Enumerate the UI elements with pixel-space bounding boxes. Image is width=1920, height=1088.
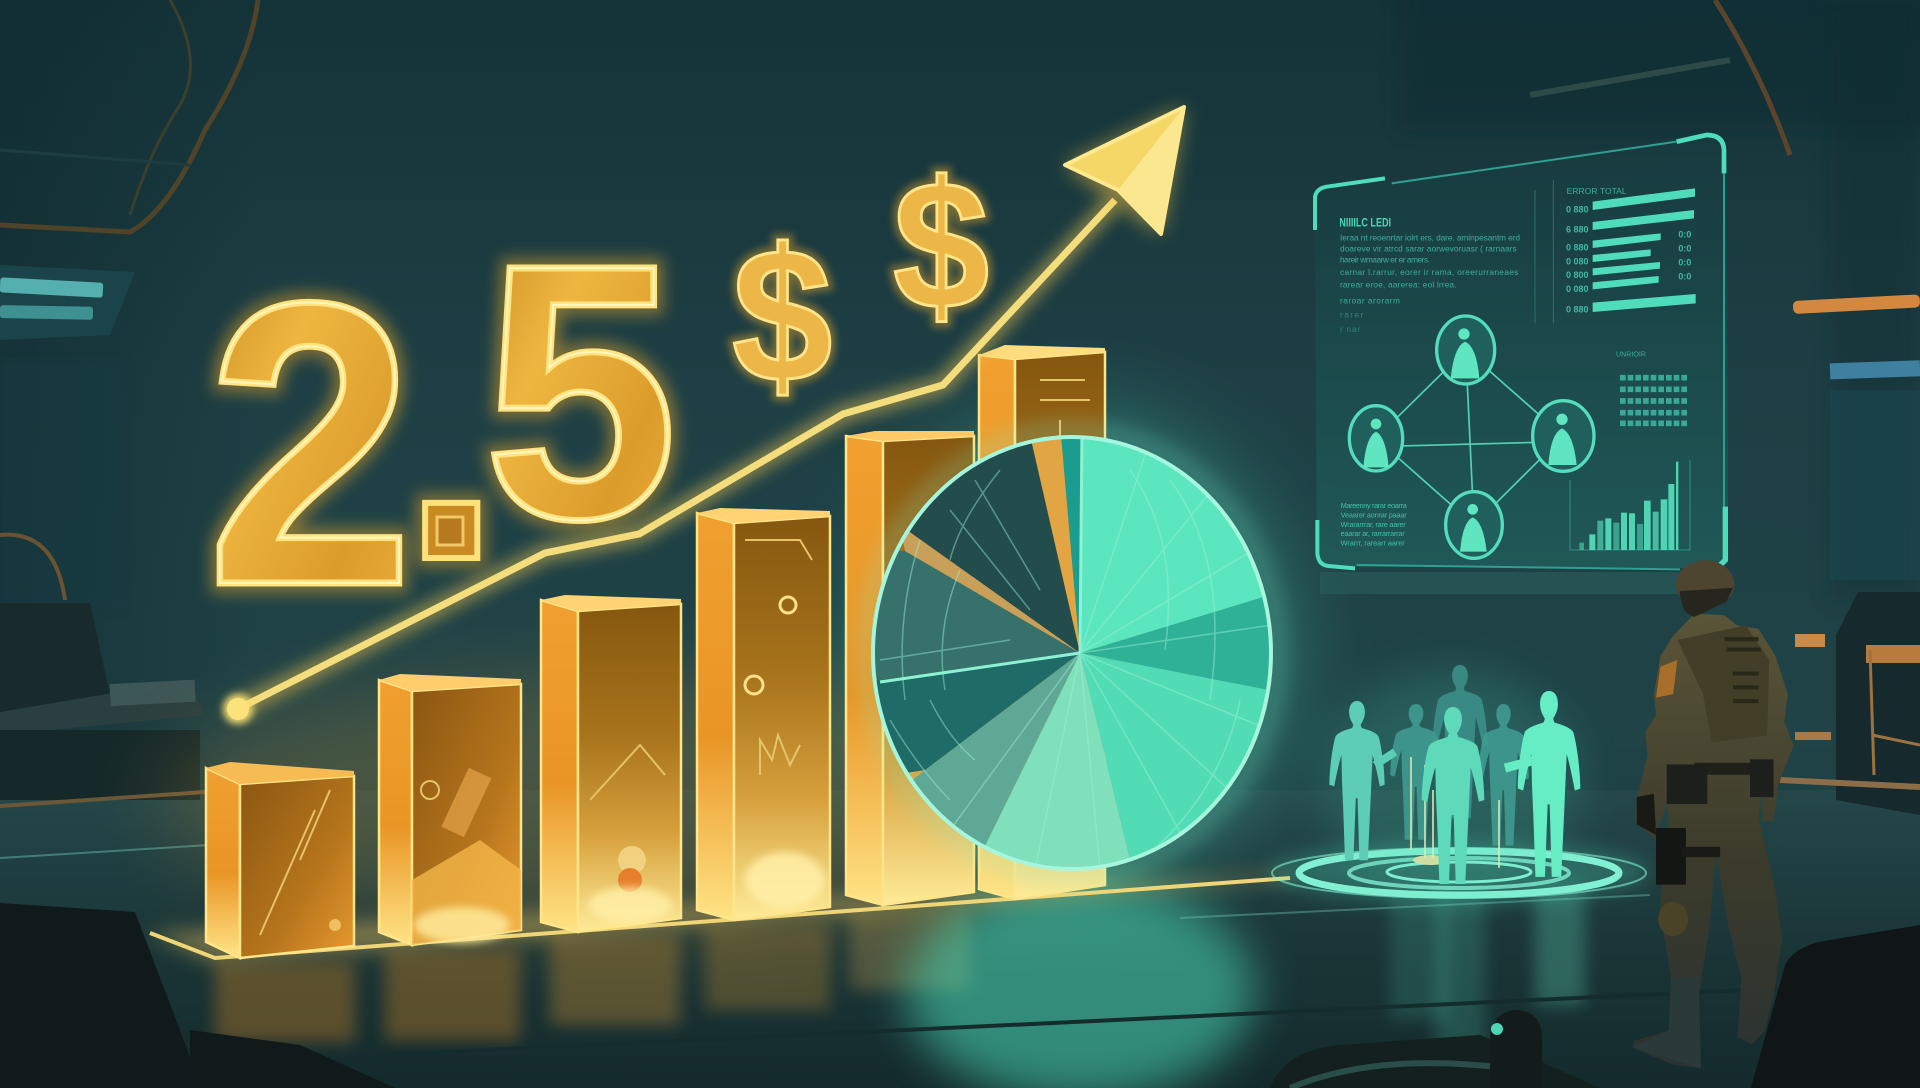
- screen footnote text: eaarar ar, rarrarrarrar: [1341, 529, 1405, 538]
- slice: tan wedge: [900, 525, 1080, 653]
- light pylons: [1411, 757, 1499, 868]
- person back right: [1478, 704, 1529, 846]
- chart glow: [160, 405, 1300, 930]
- screen body text: rarer: [1340, 309, 1364, 319]
- screen bottom reflection strip: [1320, 572, 1730, 594]
- slice: dark teal: [876, 654, 1078, 772]
- soldier figure: [1633, 560, 1794, 1068]
- big number 2.5: .: [400, 224, 503, 637]
- screen body text: [1340, 233, 1520, 334]
- screen bar list: 0:0: [1678, 243, 1691, 253]
- big number 2.5: 2: [207, 220, 414, 669]
- belt and holsters: [1694, 763, 1767, 775]
- slice: dark slate: [910, 444, 1079, 652]
- holographic wall screen: UNRIOIR: [1616, 350, 1646, 359]
- screen bar list: 0 080: [1566, 284, 1588, 294]
- person back centre: [1432, 665, 1488, 818]
- screen bar list: 0 880: [1566, 243, 1588, 253]
- left wall machinery: [0, 0, 258, 858]
- hologram group of people: [1320, 665, 1580, 890]
- screen footnote text: Wrararrrar, rare aarer: [1341, 520, 1406, 529]
- slice: teal mid: [1081, 598, 1269, 690]
- screen body text: r nar: [1340, 324, 1360, 334]
- big number 2.5: 5: [484, 191, 677, 595]
- screen footnote text: Wrarrr, rarearr aarer: [1341, 538, 1405, 547]
- floor reflections: [215, 880, 1745, 1088]
- slice: light mint: [986, 654, 1130, 867]
- bar 3: [541, 595, 681, 932]
- bar 6: [979, 345, 1105, 899]
- big number 2.5: 2: [207, 220, 414, 669]
- mini column chart: [1570, 460, 1691, 550]
- bar 2: [379, 674, 521, 945]
- network diagram: [1349, 316, 1594, 558]
- person left: [1329, 701, 1385, 860]
- slice: mint stripes: [1080, 653, 1266, 858]
- helmet: [1676, 560, 1734, 608]
- person back left: [1390, 704, 1442, 840]
- screen bar list: [1566, 186, 1696, 315]
- big number 2.5: 5: [484, 191, 677, 595]
- person front centre: [1422, 707, 1484, 884]
- foreground right monitor: [1751, 925, 1920, 1088]
- slice: grey teal: [860, 550, 1080, 682]
- screen body text: carnar l.rarrur, eorer ir rama, oreerurraneaes: [1340, 267, 1518, 277]
- screen bar list: 0 880: [1566, 205, 1588, 215]
- pie chart hologram: [860, 400, 1320, 900]
- screen body text: Ieraa nt reoenrtar iolrt ers, dare. aminpesantm erd: [1340, 233, 1520, 243]
- person right: [1518, 691, 1580, 877]
- dollar sign right: $: [893, 143, 989, 347]
- big number 2.5: [207, 191, 677, 669]
- screen bar list: 0 800: [1566, 270, 1588, 280]
- slice: muted green: [900, 653, 1080, 846]
- screen bar list: 6 880: [1566, 225, 1588, 235]
- right wall machinery: [1530, 0, 1920, 815]
- dollar sign right: $: [893, 143, 989, 347]
- screen bar list: 0:0: [1678, 257, 1691, 267]
- screen footnote text: [1341, 501, 1408, 547]
- slice: orange wedge: [1032, 439, 1078, 646]
- dollar sign left: $: [732, 210, 832, 422]
- screen body text: doareve vir atrcd sarar aorwevoruasr ( rarnaars: [1340, 243, 1517, 253]
- bar 4: [697, 508, 830, 920]
- big number 2.5: 5: [484, 191, 677, 595]
- bar 1: [206, 762, 354, 958]
- holographic wall screen: [1315, 133, 1728, 569]
- bar chart: six golden bars: [206, 345, 1105, 958]
- knee pads: [1658, 902, 1688, 936]
- big number 2.5: 2: [207, 220, 414, 669]
- screen bar list: 0:0: [1678, 271, 1691, 281]
- screen bar list: 0:0: [1678, 229, 1691, 239]
- screen body text: hareir wmaarw er er amers.: [1340, 255, 1430, 265]
- dollar sign left: $: [732, 210, 832, 422]
- slice: teal wedge: [1061, 439, 1080, 640]
- screen bar list: 0 080: [1566, 257, 1588, 267]
- screen bar list: ERROR TOTAL: [1567, 186, 1627, 196]
- shoulder patch: [1656, 660, 1677, 698]
- foreground console and knob: [1270, 1010, 1600, 1088]
- screen bar list: 0 880: [1566, 305, 1588, 315]
- tactical vest: [1677, 626, 1769, 742]
- hologram rings: [1269, 842, 1649, 902]
- foreground left monitor: [0, 903, 395, 1088]
- screen body text: raroar arorarm: [1340, 295, 1400, 305]
- data grid: [1620, 378, 1689, 423]
- bar 5: [846, 431, 974, 905]
- screen heading: NIIIILC LEDI: [1339, 216, 1391, 230]
- platform glowing edge: [147, 875, 1295, 962]
- slice: bright mint: [1082, 439, 1262, 652]
- big number 2.5: .: [400, 224, 503, 637]
- screen footnote text: Veaarer aonrar paaar: [1341, 511, 1407, 520]
- rising arrow: [223, 107, 1184, 724]
- screen footnote text: Mareenny rarar eoarra: [1341, 501, 1408, 510]
- screen body text: rarear eroe, aarerea: eol lrrea.: [1340, 279, 1457, 289]
